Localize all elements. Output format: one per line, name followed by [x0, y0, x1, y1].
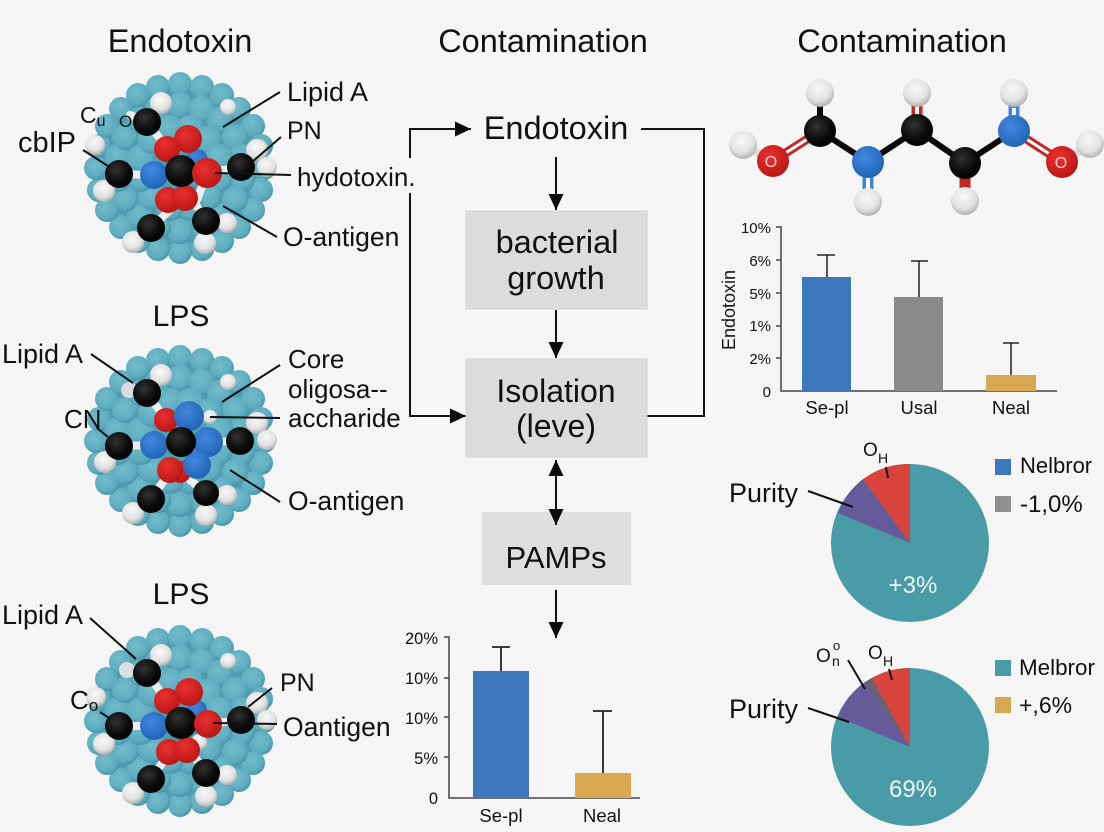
flow node: isolation level — [466, 359, 647, 457]
x axis labels: Se-pl — [805, 397, 849, 418]
bonds — [119, 389, 240, 499]
callouts — [729, 638, 893, 724]
y axis labels: 10% — [741, 220, 771, 237]
atoms — [729, 79, 1104, 216]
flow node: bacterial growth: growth — [507, 260, 605, 296]
labels: accharide — [288, 403, 401, 433]
labels — [2, 339, 404, 516]
arrow: into Isolation — [410, 193, 466, 416]
legend: Melbror — [1019, 655, 1095, 680]
leader lines — [83, 92, 291, 237]
labels: PN — [287, 117, 322, 145]
labels: O-antigen — [288, 486, 404, 516]
axis labels: 20% — [405, 630, 438, 648]
y axis title: Endotoxin — [719, 270, 739, 350]
flow node: bacterial growth: bacterial — [496, 224, 618, 260]
labels: C — [70, 685, 89, 715]
labels: u — [97, 113, 106, 130]
x axis labels — [805, 397, 1030, 418]
flow node: isolation level: Isolation — [496, 373, 616, 409]
slices — [831, 464, 989, 622]
callouts: O — [868, 643, 883, 664]
y axis labels: 2% — [749, 351, 771, 368]
axis labels: Se-pl — [479, 805, 523, 826]
flow node: isolation level: (leve) — [516, 408, 596, 444]
heading: LPS bottom: LPS — [153, 578, 209, 611]
arrow: into Endotoxin — [410, 129, 471, 158]
legend — [995, 453, 1092, 518]
labels: cbIP — [18, 127, 76, 159]
panel: flow diagram — [410, 110, 704, 638]
panel: endotoxin particle — [18, 72, 416, 264]
value label: 69% — [889, 776, 937, 803]
panel: LPS particle middle — [2, 339, 404, 537]
callouts: H — [878, 450, 888, 466]
legend — [995, 655, 1095, 718]
axis labels: 10% — [405, 710, 438, 728]
panel: LPS particle bottom — [2, 600, 391, 817]
arrow: growth to isolation — [555, 310, 557, 358]
bonds — [119, 115, 241, 228]
slices — [831, 668, 989, 826]
flow node: bacterial growth — [466, 211, 647, 309]
y axis labels: 0 — [763, 384, 771, 401]
bonds — [743, 100, 1090, 195]
callouts: n — [832, 653, 840, 669]
atom letters: O — [1055, 155, 1067, 172]
arrow: PAMPs to chart — [555, 590, 557, 638]
y axis labels: 6% — [749, 253, 771, 270]
flow node: Endotoxin: Endotoxin — [484, 110, 628, 146]
bars — [473, 671, 631, 798]
bar chart: top right — [719, 220, 1057, 418]
labels: O-antigen — [283, 222, 399, 252]
error bars — [492, 647, 612, 773]
axis labels: 5% — [414, 750, 438, 768]
x axis labels: Usal — [900, 397, 938, 418]
particle spheres — [84, 72, 276, 264]
callouts: H — [883, 653, 893, 669]
labels: CN — [64, 404, 102, 434]
y axis labels — [741, 220, 771, 401]
labels: Lipid A — [287, 77, 368, 107]
molecule: right — [729, 79, 1104, 216]
axis labels: 0 — [429, 790, 438, 808]
labels: o — [89, 696, 98, 715]
labels — [2, 600, 391, 742]
error bars — [817, 255, 1019, 375]
labels: hydotoxin. — [297, 162, 416, 192]
arrow: isolation to PAMPs double — [555, 460, 557, 525]
bars — [802, 277, 1036, 391]
arrow: endotoxin to bacterial growth — [555, 157, 557, 210]
callouts: O — [863, 440, 878, 461]
particle spheres — [84, 625, 276, 817]
labels: C — [80, 102, 97, 128]
leader lines — [90, 618, 277, 724]
heading: LPS middle: LPS — [153, 300, 209, 333]
title: Contamination right: Contamination — [797, 23, 1007, 59]
axes — [776, 227, 1057, 391]
bar chart: bottom center — [405, 630, 640, 826]
callouts: Purity — [729, 478, 799, 508]
axis labels — [405, 630, 621, 826]
bonds — [119, 670, 241, 779]
labels — [18, 77, 416, 252]
callouts: O — [816, 646, 831, 667]
leader lines — [91, 354, 280, 502]
atom letters — [765, 154, 1067, 172]
flow node: PAMPs: PAMPs — [505, 540, 607, 575]
callouts — [729, 440, 888, 508]
leaders — [808, 660, 892, 722]
axis labels: Neal — [583, 805, 621, 826]
labels: Lipid A — [2, 339, 83, 369]
axes — [444, 637, 640, 798]
callouts: o — [833, 638, 840, 653]
flow node: PAMPs — [482, 512, 631, 585]
labels: PN — [280, 669, 315, 697]
axis labels: 10% — [405, 670, 438, 688]
particle spheres — [84, 345, 276, 537]
atoms — [85, 92, 277, 254]
legend: +,6% — [1019, 692, 1072, 718]
legend: -1,0% — [1020, 491, 1083, 518]
y axis labels: 5% — [749, 286, 771, 303]
atoms — [94, 364, 277, 526]
title: Endotoxin: Endotoxin — [108, 23, 252, 59]
y axis labels: 1% — [749, 318, 771, 335]
leaders — [808, 467, 888, 507]
labels: Lipid A — [2, 600, 83, 630]
pie chart: bottom — [729, 638, 1095, 826]
x axis labels: Neal — [992, 397, 1030, 418]
atom letters: O — [765, 154, 777, 171]
title: Contamination center: Contamination — [438, 23, 648, 59]
legend: Nelbror — [1020, 453, 1092, 478]
connector: right loop — [641, 129, 704, 416]
labels: oligosa-- — [288, 374, 388, 404]
labels: Core — [288, 344, 344, 374]
value label: +3% — [889, 572, 937, 599]
labels: O — [119, 112, 132, 131]
callouts: Purity — [729, 694, 799, 724]
pie chart: top — [729, 440, 1092, 622]
atoms — [86, 644, 277, 807]
labels: Oantigen — [283, 712, 391, 742]
